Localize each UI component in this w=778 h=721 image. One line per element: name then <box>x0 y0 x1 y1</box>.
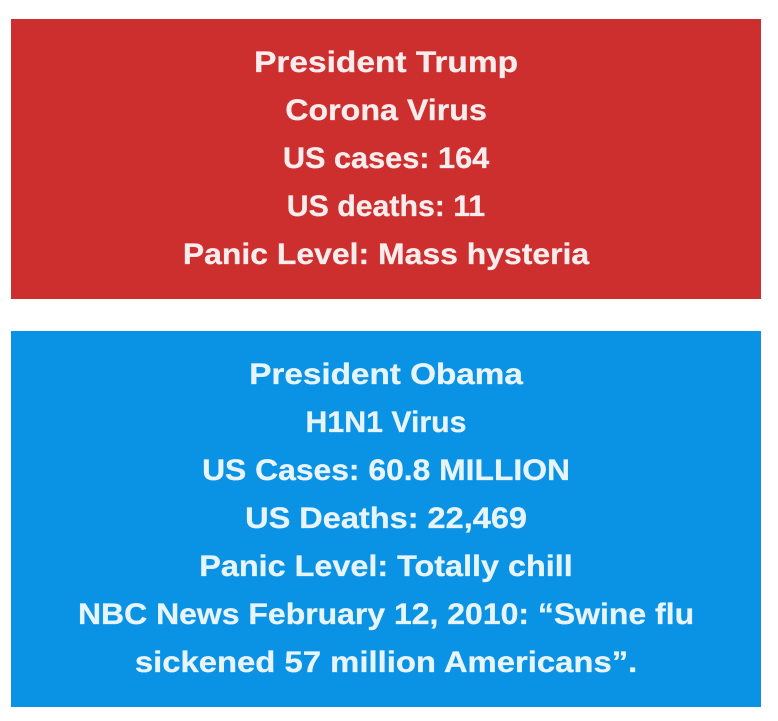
panel: Trump red <box>11 19 761 299</box>
heading: President Trump: President Trump <box>254 46 518 79</box>
text: panic level: Panic Level: Totally chill <box>199 550 573 583</box>
text: US cases: US Cases: 60.8 MILLION <box>202 454 570 487</box>
text: NBC News quote line 1: NBC News February 12, 2010: “Swine flu <box>78 598 694 631</box>
text: NBC News quote line 2: sickened 57 million Americans”. <box>135 646 637 679</box>
text: US deaths: US deaths: 11 <box>287 190 485 223</box>
heading: President Obama: President Obama <box>249 358 523 391</box>
text: US deaths: US Deaths: 22,469 <box>245 502 527 535</box>
text: US cases: US cases: 164 <box>283 142 489 175</box>
panel: Obama blue <box>11 331 761 707</box>
text: panic level: Panic Level: Mass hysteria <box>183 238 589 271</box>
text: Corona Virus: Corona Virus <box>285 94 487 127</box>
text: H1N1 Virus: H1N1 Virus <box>306 406 466 439</box>
